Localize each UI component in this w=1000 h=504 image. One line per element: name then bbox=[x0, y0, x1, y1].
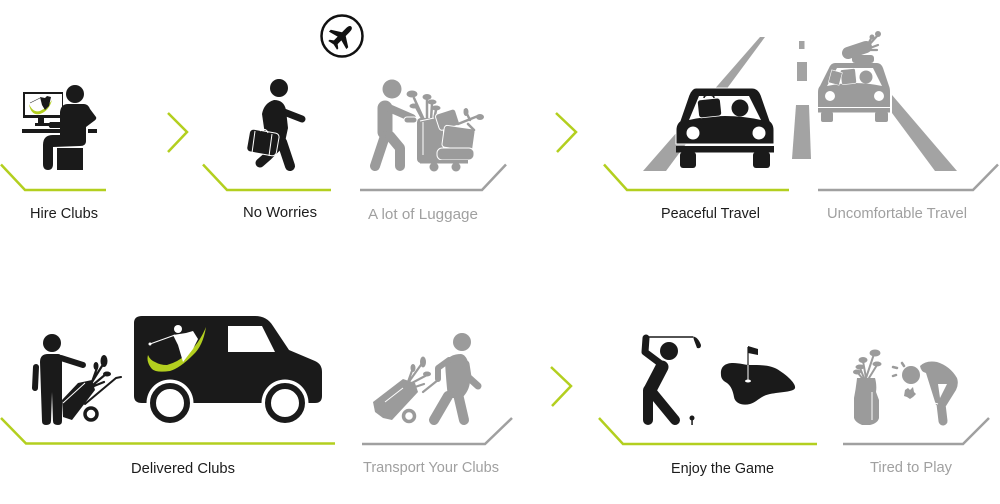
icon: putting green with flag bbox=[721, 346, 795, 405]
icon: person pulling golf bag bbox=[373, 333, 478, 422]
icon: delivery van bbox=[134, 316, 322, 426]
panel: a lot of luggage bbox=[360, 80, 506, 223]
baseline: uncomfortable travel bbox=[818, 164, 998, 190]
baseline: no worries bbox=[203, 164, 331, 190]
road edge: right bbox=[892, 95, 957, 171]
label: no worries: No Worries bbox=[243, 205, 317, 221]
icon: person at computer bbox=[22, 85, 97, 170]
label: delivered clubs: Delivered Clubs bbox=[131, 461, 235, 477]
road edge: left bbox=[643, 37, 765, 171]
label: peaceful travel: Peaceful Travel bbox=[661, 206, 760, 222]
arrow: top middle bbox=[556, 113, 576, 152]
icon: black car bbox=[676, 88, 774, 168]
baseline: peaceful travel bbox=[604, 164, 789, 190]
panel: hire clubs bbox=[1, 85, 106, 222]
panel: transport your clubs bbox=[362, 333, 512, 476]
label: tired to play: Tired to Play bbox=[870, 460, 953, 476]
baseline: hire clubs bbox=[1, 164, 106, 190]
panel: delivered clubs bbox=[1, 316, 335, 477]
panel: peaceful travel bbox=[604, 37, 789, 222]
panel: tired to play bbox=[843, 350, 989, 476]
label: transport your clubs: Transport Your Clubs bbox=[363, 460, 499, 476]
panel: uncomfortable travel bbox=[818, 31, 998, 222]
label: uncomfortable travel: Uncomfortable Travel bbox=[827, 206, 967, 222]
icon: golfer swinging bbox=[645, 336, 701, 425]
van logo bbox=[148, 325, 206, 372]
baseline: enjoy the game bbox=[599, 418, 817, 444]
icon: overloaded grey car bbox=[818, 31, 890, 122]
icon: golf bag bbox=[853, 350, 882, 425]
road: centre dashes bbox=[792, 41, 811, 159]
label: a lot of luggage: A lot of Luggage bbox=[368, 207, 478, 223]
panel: no worries bbox=[203, 79, 331, 221]
icon: person with golf bag bbox=[35, 334, 121, 425]
arrow: bottom middle bbox=[551, 367, 571, 406]
label: hire clubs: Hire Clubs bbox=[30, 206, 98, 222]
arrow: top left bbox=[168, 113, 187, 152]
label: enjoy the game: Enjoy the Game bbox=[671, 461, 774, 477]
icon: person pushing luggage cart bbox=[375, 80, 484, 172]
icon: exhausted person bending over bbox=[893, 362, 958, 421]
baseline: luggage bbox=[360, 164, 506, 190]
baseline: delivered clubs bbox=[1, 418, 335, 444]
icon: airplane badge bbox=[322, 16, 362, 56]
baseline: transport your clubs bbox=[362, 418, 512, 444]
baseline: tired to play bbox=[843, 418, 989, 444]
icon: walking person with bag bbox=[246, 79, 302, 166]
panel: enjoy the game bbox=[599, 336, 817, 477]
